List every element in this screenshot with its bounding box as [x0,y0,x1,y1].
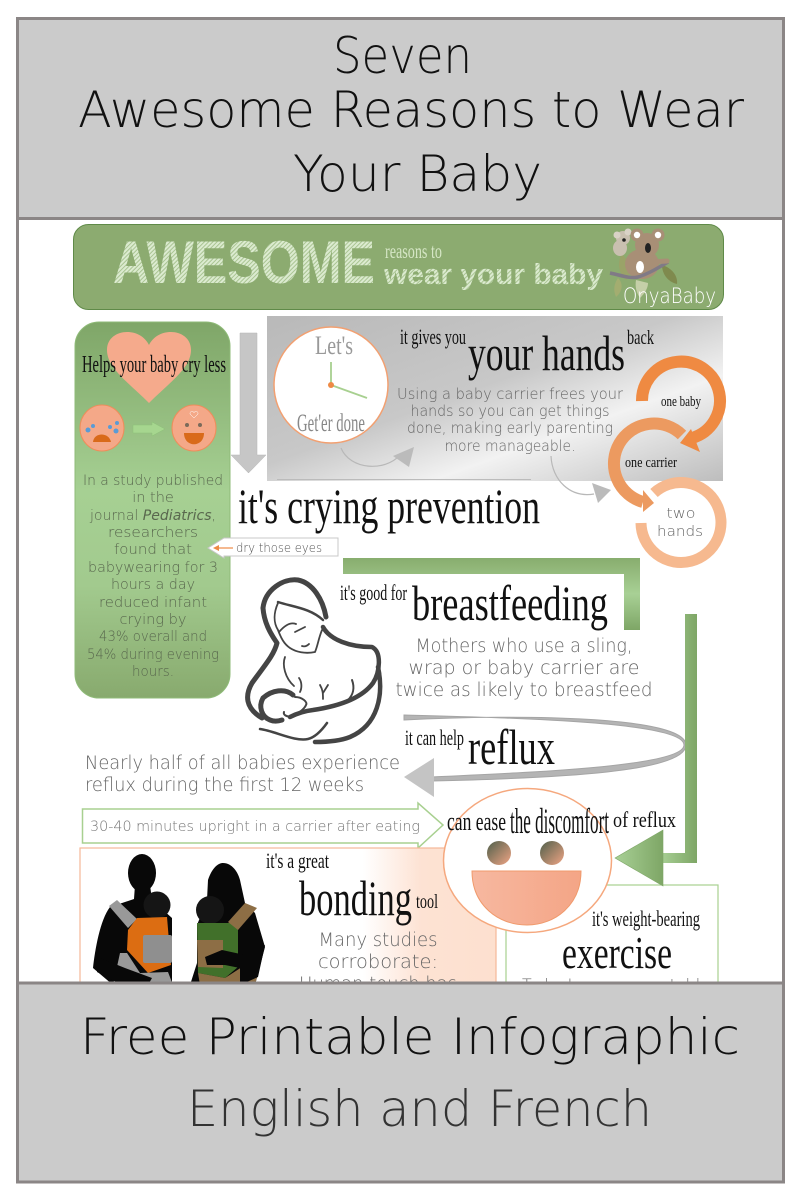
text: study details: babywearing for 3 [88,560,218,576]
heading: reflux: reflux [468,719,555,775]
icon: smiling baby [172,405,216,451]
text: study details: journal Pediatrics, [89,508,216,524]
banner words wear your baby: wear your baby [383,259,603,291]
arrow: upright in a carrier [82,803,443,848]
text: study details: hours. [132,664,174,680]
text: hands body: more manageable. [444,437,576,455]
callout: dry those eyes: dry those eyes [236,541,322,555]
heading: can ease the discomfort of reflux: the discomfort [510,801,609,841]
ring: two hands: hands [657,524,703,540]
icon: heart [107,332,191,403]
panel: bonding [80,848,496,998]
text: study details: found that [114,542,192,558]
rule [277,478,531,480]
ring: two hands [641,483,721,563]
text: study details: reduced infant [99,595,207,611]
text: reflux facts: Nearly half of all babies experience [85,753,400,774]
text: study details: In a study published [83,473,223,489]
text: study details: researchers [108,525,198,541]
heading: can ease the discomfort of reflux: can ease [447,807,506,836]
text: hands body: hands so you can get things [410,402,610,420]
footer band [18,983,784,1182]
label: back: back [627,327,654,349]
text: breastfeeding body [396,636,652,701]
arrow: grey swoosh to reflux text [404,715,686,797]
side borders [18,218,784,984]
arrow: upright in a carrier: 30-40 minutes upright in a carrier after eating [90,819,420,835]
title line: Your Baby: Your Baby [293,145,542,203]
ring: one carrier: one carrier [625,455,677,471]
heading: can ease the discomfort of reflux: of reflux [613,807,676,832]
icon: clock: Get'er done [297,410,365,437]
icon: smiley face [444,788,612,932]
arrow: clock to text [341,447,414,467]
banner words reasons to: reasons to [385,239,442,263]
panel: cry less [75,322,230,698]
icon: clock [274,327,388,443]
green banner [74,224,724,310]
diagram: one baby, one carrier, two hands rings [614,362,721,563]
text: study details: hours a day [111,577,195,593]
text: study details: 43% overall and [99,629,207,645]
heading: crying prevention: it's crying prevention [238,478,540,534]
text: reflux facts [85,753,400,796]
footer line: English and French: English and French [187,1080,652,1138]
text: hands body: done, making early parenting [407,419,613,437]
panel: exercise [506,885,718,996]
callout: dry those eyes [208,538,338,558]
text: study details: crying by [120,612,186,628]
title band [18,18,784,218]
label: it's weight-bearing: it's weight-bearing [592,906,700,931]
brand OnyaBaby: OnyaBaby [623,284,716,308]
text: bonding body: Human touch has [299,974,457,995]
illustration: parents wearing babies [93,854,265,985]
ring: one carrier [614,424,682,512]
ring: one baby: one baby [661,394,701,410]
text: bonding body [299,930,457,995]
heading: breastfeeding: breastfeeding [412,575,608,631]
arrow: grey down shaft and head [231,333,266,473]
heading: your hands: your hands [468,325,625,381]
ring: one baby [642,362,720,452]
label: it can help: it can help [405,725,464,750]
footer line: Free Printable Infographic: Free Printable Infographic [80,1008,740,1066]
text: study details: in the [132,490,174,506]
label: it gives you: it gives you [400,324,466,349]
text: hands body: Using a baby carrier frees your [397,385,624,403]
text: study details [83,473,223,680]
panel: your hands [267,316,723,481]
arrow: green elbow [343,558,640,630]
infographic panel [74,224,724,998]
label: tool: tool [416,891,438,913]
text: breastfeeding body: Mothers who use a sling, [416,636,632,657]
text: breastfeeding body: twice as likely to breastfeed [396,680,652,701]
heading: helps your baby cry less: Helps your baby cry less [82,352,226,378]
title line: Awesome Reasons to Wear: Awesome Reasons to Wear [78,81,744,139]
heading: exercise: exercise [562,927,672,978]
icon: koalas on branch [610,228,677,298]
banner word AWESOME: AWESOME [113,229,375,296]
ring: two hands: two [666,506,696,522]
title line: Seven: Seven [333,27,472,85]
text: exercise body: Today's moms are told [522,976,700,996]
icon: crying baby [80,405,124,451]
icon: breastfeeding mother [248,580,380,742]
text: study details: 54% during evening [87,647,219,663]
text: reflux facts: reflux during the first 12 weeks [85,775,364,796]
heading: can ease the discomfort of reflux [447,801,676,841]
text: breastfeeding body: wrap or baby carrier are [408,658,640,679]
icon: clock: Let's [315,331,353,360]
arrow: cry to smile [133,422,165,436]
heading: bonding: bonding [299,870,412,926]
arrow: text to rings [551,456,611,503]
label: it's a great: it's a great [266,848,329,873]
text: hands body [397,385,624,455]
label: it's good for: it's good for [340,580,407,605]
arrow: green to smiley [615,614,697,886]
text: bonding body: corroborate: [318,952,438,973]
text: bonding body: Many studies [318,930,438,951]
